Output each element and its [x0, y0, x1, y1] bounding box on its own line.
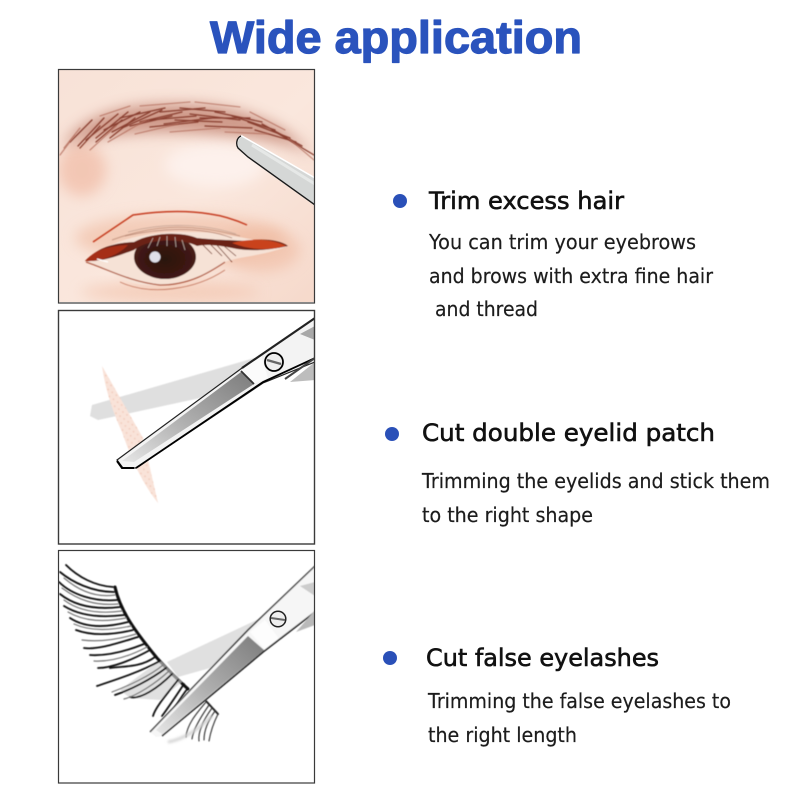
icon: lower blade — [167, 617, 263, 677]
text block: eyelid patch description: Trimming the eyelids and stick them — [421, 469, 770, 493]
icon: upper blade — [150, 566, 315, 742]
text block: false eyelashes description: the right length — [428, 723, 577, 747]
title: Wide application — [210, 12, 582, 63]
text block: eyelid patch description: to the right shape — [422, 503, 593, 527]
icon: eyelid patch — [102, 366, 158, 503]
text block: eyelid patch description — [421, 469, 770, 527]
panel: eyebrow and eye photo — [58, 69, 315, 303]
heading: trim excess hair: Trim excess hair — [428, 187, 624, 215]
icon: eye — [85, 211, 288, 290]
bullet: trim excess hair — [393, 194, 407, 208]
heading: cut false eyelashes: Cut false eyelashes — [426, 644, 659, 672]
icon: false eyelashes — [59, 565, 218, 741]
icon: pivot screw — [270, 611, 286, 627]
text block: false eyelashes description: Trimming the false eyelashes to — [427, 689, 731, 713]
text block: trim excess hair description: You can trim your eyebrows — [428, 230, 696, 254]
icon: eyebrow — [60, 102, 314, 160]
icon: upper blade — [117, 318, 315, 468]
icon: tweezer tip — [237, 136, 315, 205]
panel: scissors cutting false eyelashes — [58, 550, 315, 784]
panel: scissors cutting eyelid patch — [58, 310, 315, 544]
text block: trim excess hair description: and brows with extra fine hair — [429, 264, 714, 288]
heading: cut double eyelid patch: Cut double eyelid patch — [422, 419, 715, 447]
icon: lower blade — [90, 357, 263, 420]
bullet: cut false eyelashes — [383, 651, 397, 665]
text block: trim excess hair description — [428, 230, 714, 321]
text block: false eyelashes description — [427, 689, 731, 747]
icon: pivot screw — [265, 353, 283, 371]
text block: trim excess hair description: and thread — [435, 297, 538, 321]
bullet: cut double eyelid patch — [385, 427, 399, 441]
